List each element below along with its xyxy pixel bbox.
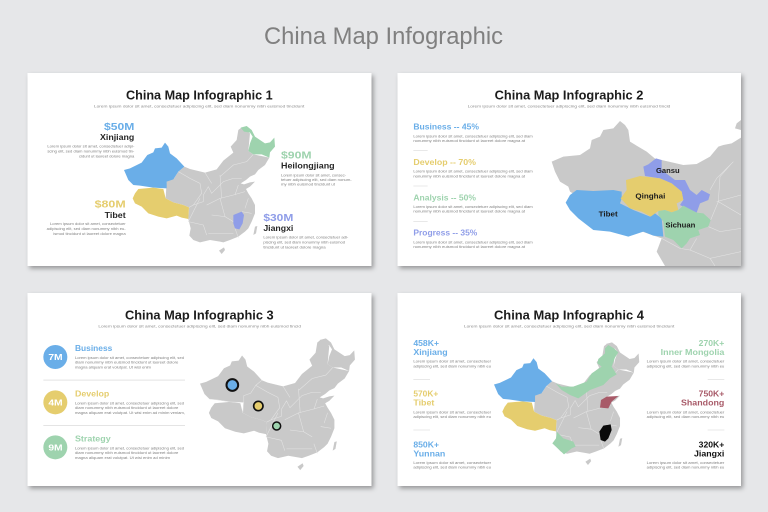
map: zoomed western China xyxy=(552,120,741,266)
item: Develop 4M: 4M xyxy=(48,397,63,407)
stat: Shandong: 750K+ xyxy=(699,390,725,399)
stat: Tibet: adipiscing elit, sed diam nonummy nibh eu xyxy=(413,415,491,419)
item: Develop 4M: diam nonummy nibh euismod tincidunt ut laoreet dolore xyxy=(75,406,178,410)
stat: Inner Mongolia: 270K+ xyxy=(699,339,725,348)
callout: Jiangxi: Lorem ipsum dolor sit amet, consectetuer adi- xyxy=(263,236,349,240)
map labels xyxy=(599,168,695,229)
heading 4: China Map Infographic 4 xyxy=(494,308,644,322)
callout: Jiangxi: tincidunt ut laoreet dolore magna xyxy=(263,246,327,250)
item: Progress: Lorem ipsum dolor sit amet, consectetuer adipiscing elit, sed diam xyxy=(413,240,533,244)
item: Develop 4M: Lorem ipsum dolor sit amet, consectetuer adipiscing elit, sed xyxy=(75,401,184,405)
map labels: Sichuan xyxy=(665,222,695,229)
stat: Inner Mongolia: Lorem ipsum dolor sit amet, consectetuer xyxy=(647,359,725,363)
item: Develop: Lorem ipsum dolor sit amet, consectetuer adipiscing elit, sed diam xyxy=(413,169,533,173)
stat: Tibet: Tibet xyxy=(413,399,435,408)
callout: Heilongjiang: Heilongjiang xyxy=(281,162,335,171)
province: Shandong xyxy=(600,396,618,408)
stat: Jiangxi xyxy=(647,440,725,470)
callout: Heilongjiang: tetuer adipiscing elit, sed diam nonum- xyxy=(281,178,352,182)
marker: blue xyxy=(226,379,238,391)
item: Analysis xyxy=(413,192,533,222)
heading 3: China Map Infographic 3 xyxy=(125,308,274,322)
subtitle 3: Lorem ipsum dolor sit amet, consectetuer adipiscing elit, sed diam nonummy nibh euismod tincid xyxy=(98,325,301,329)
map: China with location markers xyxy=(200,338,355,470)
divider xyxy=(43,424,185,427)
item: Develop 4M: magna aliquam erat volutpat. Ut wisi enim ad minim veniam, xyxy=(75,411,185,415)
stat: Shandong xyxy=(647,390,725,430)
callout: Tibet: adipiscing elit, sed diam nonummy nibh eu- xyxy=(47,227,126,231)
callout: Xinjiang: scing elit, sed diam nonummy nibh euismod tin- xyxy=(47,149,135,153)
stat: Xinjiang: Lorem ipsum dolor sit amet, consectetuer xyxy=(413,359,492,363)
item: Business: Business -- 45% xyxy=(413,122,480,132)
callout: Xinjiang: cidunt ut laoreet dolore magna xyxy=(79,154,135,158)
panel: infographic 1 xyxy=(28,73,372,266)
callout: Tibet xyxy=(47,200,127,236)
item: Strategy 9M: diam nonummy nibh euismod tincidunt ut laoreet dolore xyxy=(75,451,178,455)
item: Analysis: Lorem ipsum dolor sit amet, consectetuer adipiscing elit, sed diam xyxy=(413,205,533,209)
stat: Yunnan: adipiscing elit, sed diam nonummy nibh eu xyxy=(413,466,491,470)
stat: Xinjiang: Xinjiang xyxy=(413,348,448,357)
subtitle 1: Lorem ipsum dolor sit amet, consectetuer adipiscing elit, sed diam nonummy nibh euismod tincidunt xyxy=(94,105,304,109)
item: Progress: nonummy nibh euismod tincidunt ut laoreet dolore magna at xyxy=(413,245,526,249)
item: Business 7M: Business xyxy=(75,343,113,353)
item: Business 7M: diam nonummy nibh euismod tincidunt ut laoreet dolore xyxy=(75,361,178,365)
item: Develop 4M xyxy=(43,388,185,415)
stat: Shandong: Shandong xyxy=(681,399,724,408)
callout: Heilongjiang: Lorem ipsum dolor sit amet, consec- xyxy=(281,173,347,177)
item: Analysis: Analysis -- 50% xyxy=(413,192,477,202)
item: Business: nonummy nibh euismod tincidunt ut laoreet dolore magna at xyxy=(413,139,526,143)
province: Jiangxi xyxy=(599,424,612,442)
callout: Xinjiang: $50M xyxy=(104,122,134,133)
callout: Tibet: Tibet xyxy=(105,211,126,220)
stat: Jiangxi: adipiscing elit, sed diam nonummy nibh eu xyxy=(647,466,724,470)
stat: Jiangxi: Jiangxi xyxy=(694,449,724,458)
item: Business xyxy=(413,122,533,151)
item: Progress xyxy=(413,228,533,249)
map labels: Tibet xyxy=(599,212,618,219)
callout: Jiangxi: piscing elit, sed diam nonummy nibh euismod xyxy=(263,240,345,244)
stat: Jiangxi: 320K+ xyxy=(699,440,725,449)
item: Strategy 9M: Lorem ipsum dolor sit amet, consectetuer adipiscing elit, sed xyxy=(75,446,184,450)
callout: Heilongjiang: $90M xyxy=(281,151,312,162)
stat: Inner Mongolia xyxy=(647,339,725,380)
callout: Tibet: $80M xyxy=(95,200,126,211)
item: Strategy 9M xyxy=(43,433,184,460)
stat: Xinjiang xyxy=(413,339,492,380)
callout: Jiangxi: Jiangxi xyxy=(263,224,293,233)
stat: Yunnan xyxy=(413,440,492,470)
callout: Xinjiang xyxy=(47,122,135,158)
item: Business 7M: magna aliquam erat volutpat. Ut wisi enim xyxy=(75,366,151,370)
item: Develop xyxy=(413,157,533,186)
item: Business: Lorem ipsum dolor sit amet, consectetuer adipiscing elit, sed diam xyxy=(413,134,533,138)
stat: Yunnan: Lorem ipsum dolor sit amet, consectetuer xyxy=(413,461,492,465)
item: Progress: Progress -- 35% xyxy=(413,228,478,238)
stat: Xinjiang: 458K+ xyxy=(413,339,439,348)
item: Strategy 9M: Strategy xyxy=(75,433,111,443)
stat: Yunnan: 850K+ xyxy=(413,440,439,449)
stat: Xinjiang: adipiscing elit, sed diam nonummy nibh eu xyxy=(413,364,491,368)
stat: Tibet xyxy=(413,390,492,430)
province: Sichuan xyxy=(658,206,711,248)
item: Develop: nonummy nibh euismod tincidunt ut laoreet dolore magna at xyxy=(413,174,526,178)
stat: Jiangxi: Lorem ipsum dolor sit amet, consectetuer xyxy=(647,461,725,465)
callout: Jiangxi: $30M xyxy=(263,213,293,224)
stat: Shandong: Lorem ipsum dolor sit amet, consectetuer xyxy=(647,410,725,414)
heading 2: China Map Infographic 2 xyxy=(495,88,643,102)
province: Qinghai xyxy=(621,176,683,217)
stat: Tibet: Lorem ipsum dolor sit amet, consectetuer xyxy=(413,410,492,414)
map: China with six highlighted provinces xyxy=(494,342,639,465)
subtitle 4: Lorem ipsum dolor sit amet, consectetuer adipiscing elit, sed diam nonummy nibh euismod tincidunt xyxy=(464,325,674,329)
callout: Heilongjiang xyxy=(281,151,352,187)
map labels: Gansu xyxy=(656,168,680,175)
divider xyxy=(43,379,185,381)
callout: Xinjiang: Xinjiang xyxy=(100,133,134,142)
item: Develop 4M: Develop xyxy=(75,388,109,398)
heading 1: China Map Infographic 1 xyxy=(126,88,273,102)
marker: yellow xyxy=(254,401,263,411)
callout: Xinjiang: Lorem ipsum dolor sit amet, consectetuer adipi- xyxy=(47,145,135,149)
stat: Tibet: 570K+ xyxy=(413,390,439,399)
item: Business 7M: Lorem ipsum dolor sit amet, consectetuer adipiscing elit, sed xyxy=(75,356,184,360)
stat: Inner Mongolia: Inner Mongolia xyxy=(661,348,725,357)
item: Strategy 9M: 9M xyxy=(48,442,63,452)
item: Business 7M xyxy=(43,343,184,370)
panel: infographic 3 xyxy=(28,293,372,486)
panel: infographic 2 xyxy=(398,73,741,266)
item: Strategy 9M: magna aliquam erat volutpat. Ut wisi enim ad minim xyxy=(75,456,170,460)
callout: Heilongjiang: my nibh euismod tincidunt ut xyxy=(281,183,336,187)
panel: infographic 4 xyxy=(398,293,741,486)
callout: Jiangxi xyxy=(263,213,349,250)
province: Gansu xyxy=(643,158,710,213)
item: Analysis: nonummy nibh euismod tincidunt ut laoreet dolore magna at xyxy=(413,210,526,214)
stat: Inner Mongolia: adipiscing elit, sed diam nonummy nibh eu xyxy=(647,364,724,368)
province: Yunnan xyxy=(552,432,576,454)
province: Tibet xyxy=(566,190,663,237)
map labels: Qinghai xyxy=(635,194,665,201)
stat: Yunnan: Yunnan xyxy=(413,449,445,458)
marker: green xyxy=(273,422,281,430)
province: Inner Mongolia xyxy=(556,345,618,398)
callout: Tibet: Lorem ipsum dolor sit amet, consectetuer xyxy=(50,222,126,226)
stat: Shandong: adipiscing elit, sed diam nonummy nibh eu xyxy=(647,415,724,419)
item: Develop: Develop -- 70% xyxy=(413,157,477,167)
main title: China Map Infographic xyxy=(264,23,503,50)
map: China with highlighted provinces xyxy=(124,126,275,254)
item: Business 7M: 7M xyxy=(48,352,63,362)
callout: Tibet: ismod tincidunt ut laoreet dolore magna xyxy=(53,232,127,236)
subtitle 2: Lorem ipsum dolor sit amet, consectetuer adipiscing elit, sed diam nonummy nibh euismod tincid xyxy=(468,105,670,109)
